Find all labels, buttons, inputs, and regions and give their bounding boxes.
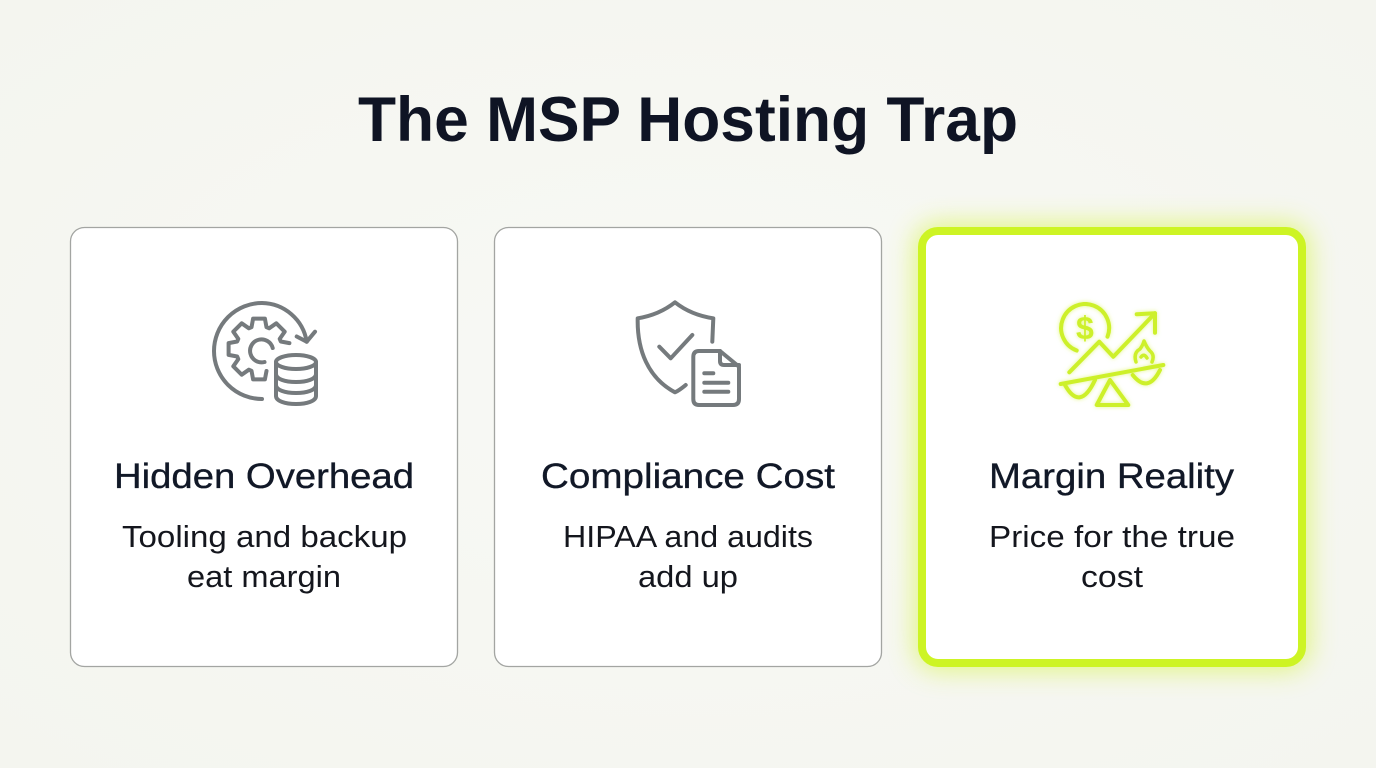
title: The MSP Hosting Trap	[358, 85, 1018, 155]
icon: shield and document	[638, 302, 739, 405]
panel: hidden overhead	[70, 228, 458, 666]
panel: margin reality (highlighted)	[914, 223, 1310, 671]
text: compliance cost description	[563, 520, 813, 594]
heading: compliance cost: Compliance Cost	[541, 457, 835, 496]
icon: dollar, rising arrow and balance scale: $	[1076, 310, 1094, 346]
text: margin reality description	[989, 520, 1235, 594]
icon: gear, cycle arrow and database	[214, 303, 316, 404]
heading: hidden overhead: Hidden Overhead	[114, 457, 414, 496]
text: hidden overhead description: Tooling and backup	[122, 520, 407, 554]
text: compliance cost description: add up	[638, 560, 738, 594]
heading: margin reality: Margin Reality	[989, 457, 1235, 496]
panel: compliance cost	[494, 228, 882, 666]
text: hidden overhead description: eat margin	[187, 560, 341, 594]
icon: dollar, rising arrow and balance scale	[1061, 304, 1163, 405]
text: hidden overhead description	[122, 520, 407, 594]
text: compliance cost description: HIPAA and audits	[563, 520, 813, 554]
text: margin reality description: cost	[1081, 560, 1144, 594]
text: margin reality description: Price for the true	[989, 520, 1235, 554]
